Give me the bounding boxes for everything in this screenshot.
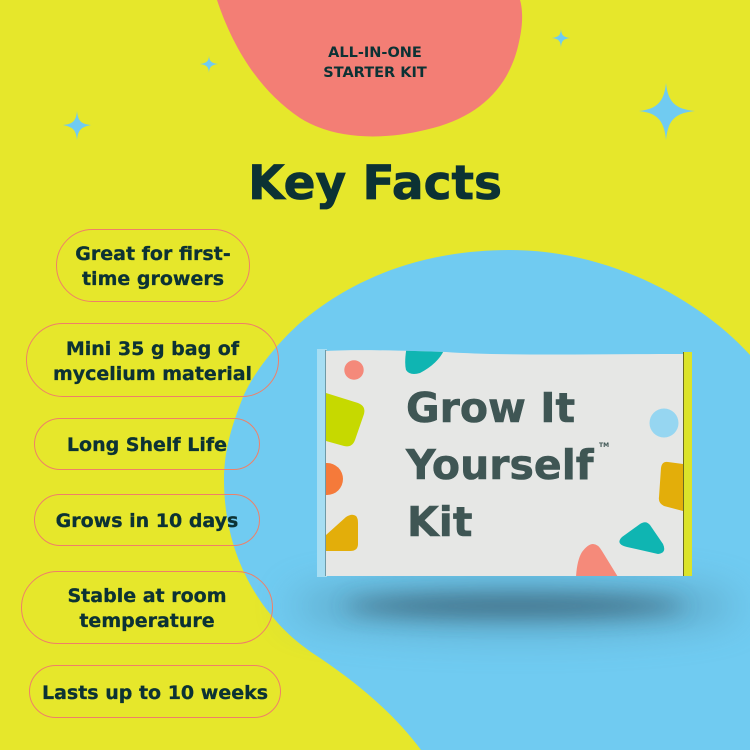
coral blob (217, 0, 522, 136)
fact: lasts 10 weeks: Lasts up to 10 weeks (42, 682, 268, 704)
fact: lasts 10 weeks (29, 665, 281, 718)
box label text: Kit (407, 498, 472, 546)
fact: first-time growers: time growers (82, 268, 224, 290)
box label text (405, 384, 609, 546)
kit label (323, 45, 427, 81)
kit box (311, 345, 692, 577)
fact: grows in 10 days (34, 494, 260, 546)
kit label: ALL-IN-ONE (328, 45, 422, 61)
fact: room temperature: Stable at room (68, 585, 226, 607)
fact: first-time growers: Great for first- (75, 243, 231, 265)
fact: mini bag: mycelium material (53, 362, 252, 384)
fact: mini bag (26, 323, 279, 397)
fact: shelf life (34, 418, 260, 470)
kit label: STARTER KIT (323, 65, 427, 81)
fact: shelf life: Long Shelf Life (67, 434, 227, 456)
fact: room temperature: temperature (79, 610, 215, 632)
blue blob (224, 250, 750, 750)
fact: first-time growers (56, 229, 250, 302)
fact: room temperature (21, 571, 273, 644)
box label text: Yourself (406, 441, 594, 489)
sparkles (63, 29, 695, 140)
fact: mini bag: Mini 35 g bag of (66, 338, 239, 360)
box label text: Grow It (406, 384, 575, 432)
fact: grows in 10 days: Grows in 10 days (56, 510, 238, 532)
box label text: TM (599, 442, 609, 449)
title: Key Facts (248, 156, 502, 211)
box shadow (290, 582, 740, 630)
